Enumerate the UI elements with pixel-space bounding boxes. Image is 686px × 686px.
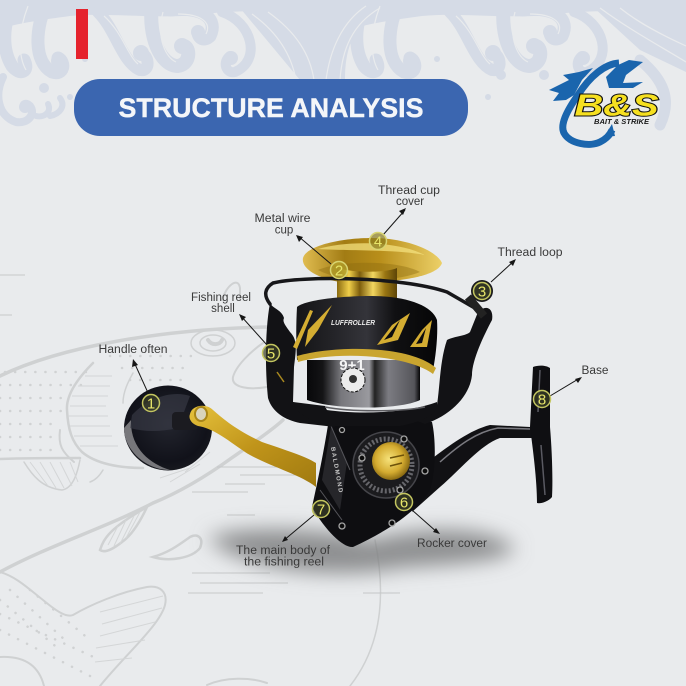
speed lines [0, 275, 400, 593]
foot and stem [412, 366, 552, 512]
lower cylinder: 9+1 [339, 357, 365, 374]
badge 2 [330, 262, 348, 280]
badge 1: 1 [147, 396, 155, 412]
badge 7: 7 [317, 502, 325, 518]
badge 8: 8 [538, 392, 546, 408]
ground shadow [208, 529, 515, 573]
bail wire [266, 279, 473, 307]
fish scale dots [0, 356, 200, 676]
badge 4 [370, 232, 386, 250]
spool disk [303, 238, 442, 282]
rotor body [293, 296, 437, 374]
badge 6: 6 [400, 494, 408, 512]
title: STRUCTURE ANALYSIS [118, 93, 424, 123]
left arm [266, 303, 335, 427]
label: Thread cup cover: Thread cup [378, 185, 440, 197]
gear housing [312, 415, 435, 547]
label: Thread loop: Thread loop [498, 247, 562, 259]
label: Rocker cover: Rocker cover [417, 538, 487, 550]
red accent bar [76, 9, 88, 59]
badge 4: 4 [374, 234, 382, 250]
label: Base: Base [582, 365, 608, 377]
badge 3: 3 [478, 284, 486, 300]
spool neck [337, 268, 397, 300]
label: Metal wire cup: cup [275, 224, 293, 236]
number badges [142, 232, 550, 518]
lower cylinder [293, 357, 437, 426]
label: Handle often: Handle often [98, 344, 168, 356]
rotor body: LUFFROLLER [331, 318, 376, 327]
badge 6 [396, 494, 412, 512]
label: Fishing reel shell: shell [211, 303, 235, 315]
title pill [74, 79, 468, 136]
logo: B&S Bait & Strike: BAIT & STRIKE [594, 117, 650, 126]
label: Thread cup cover: cover [396, 196, 424, 208]
gear housing: BALDMOND [329, 447, 343, 494]
badge 1 [142, 394, 160, 412]
badge 3 [474, 282, 490, 300]
ornamental floral band [0, 0, 686, 125]
handle knob [124, 386, 212, 470]
label: The main body of the fishing reel: the fishing reel [244, 556, 324, 568]
badge 7 [312, 500, 330, 518]
right arm and line roller [400, 280, 493, 424]
fishing reel [124, 238, 552, 547]
badge 5 [262, 344, 280, 362]
gold crank arm [189, 406, 316, 487]
logo: B&S Bait & Strike: B&S [574, 88, 659, 122]
logo: B&S Bait & Strike [549, 60, 659, 144]
callout arrows [132, 208, 582, 542]
fish fin and gill hatching [30, 376, 210, 662]
badge 8 [534, 390, 550, 408]
badge 2: 2 [335, 262, 343, 280]
label: Fishing reel shell: Fishing reel [191, 292, 251, 304]
badge 5: 5 [267, 346, 275, 362]
label: Metal wire cup: Metal wire [254, 213, 310, 225]
fish line illustration [0, 283, 381, 686]
label: The main body of the fishing reel: The main body of [236, 545, 331, 557]
